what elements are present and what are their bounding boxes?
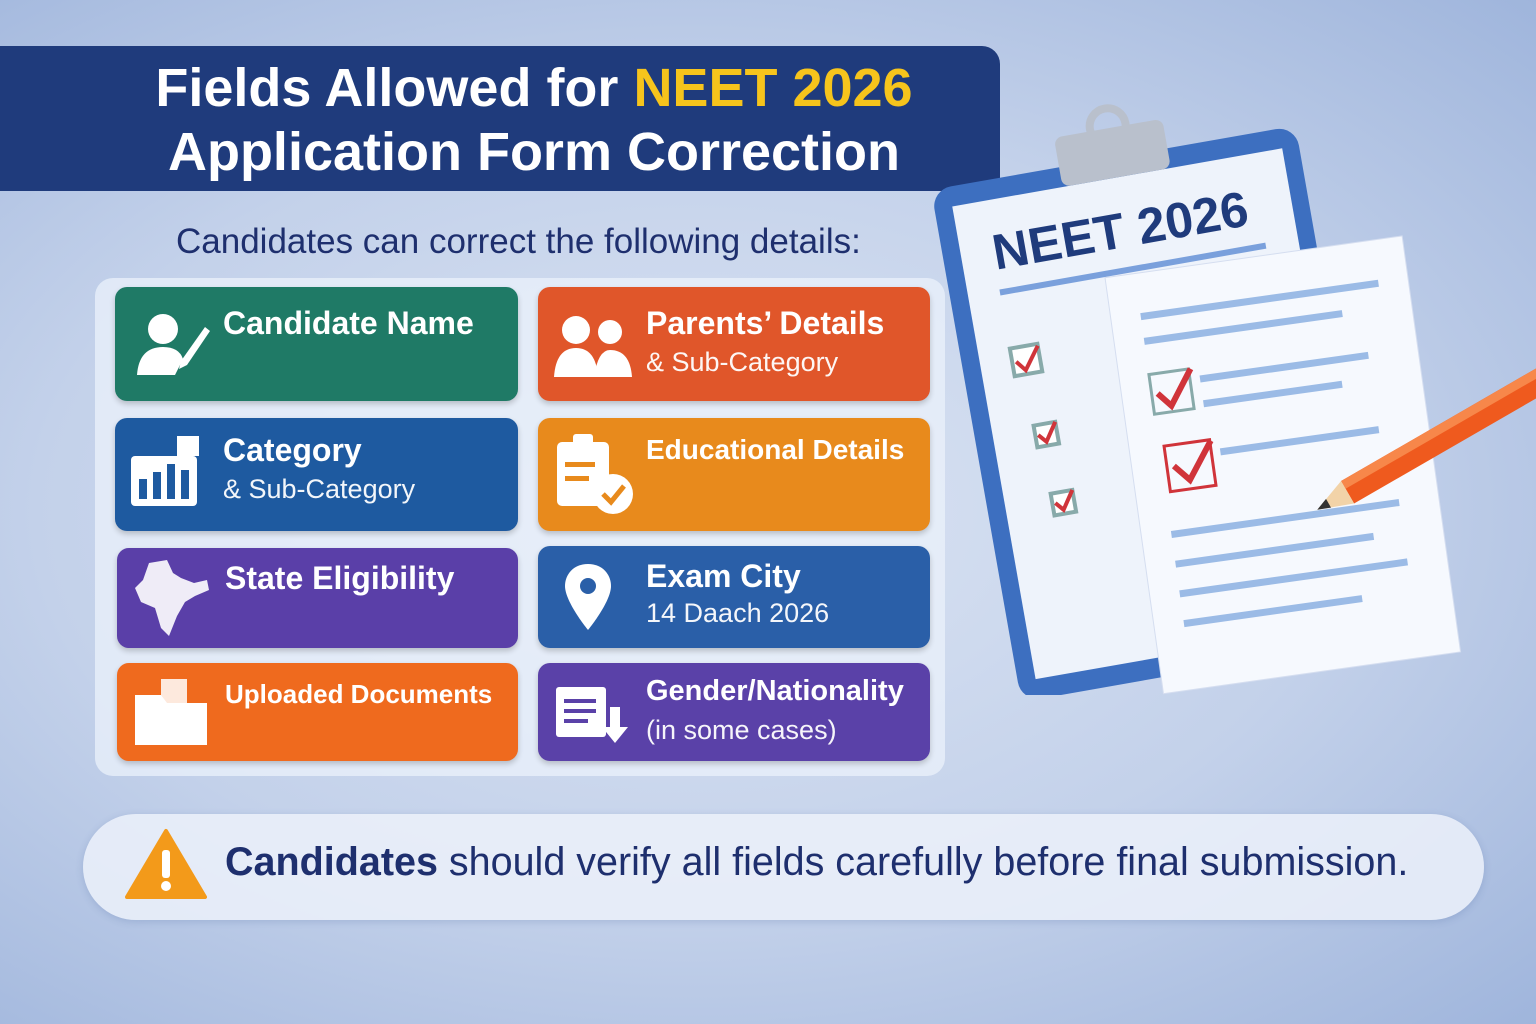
card: category: & Sub-Category (223, 474, 415, 504)
title banner: Application Form Correction (168, 122, 900, 182)
title banner (0, 46, 1000, 191)
card: candidate name (115, 287, 518, 401)
card: exam city: 14 Daach 2026 (646, 598, 829, 628)
callout: verify fields: Candidates should verify all fields carefully before final submission. (225, 840, 1408, 884)
card: gender/nationality (538, 663, 930, 761)
card: category: Category (223, 432, 362, 468)
illustration: clipboard with NEET 2026 forms: NEET 2026 (988, 181, 1252, 281)
subtitle: Candidates can correct the following details: (176, 222, 861, 261)
card: state eligibility: State Eligibility (225, 560, 454, 596)
card: exam city: Exam City (646, 558, 801, 594)
card: candidate name: Candidate Name (223, 305, 474, 341)
card: uploaded documents (117, 663, 518, 761)
panel: fields (95, 278, 945, 776)
card: uploaded documents: Uploaded Documents (225, 679, 492, 709)
card: state eligibility (117, 548, 518, 648)
card: parents details (538, 287, 930, 401)
callout: verify fields (83, 814, 1484, 920)
card: parents details: & Sub-Category (646, 347, 838, 377)
title banner: Fields Allowed for NEET 2026 (155, 58, 913, 118)
card: parents details: Parents’ Details (646, 305, 884, 341)
card: exam city (538, 546, 930, 648)
card: educational details: Educational Details (646, 434, 904, 465)
illustration: clipboard with NEET 2026 forms (934, 104, 1536, 695)
icon: warning (125, 828, 207, 899)
card: educational details (538, 418, 930, 531)
card: gender/nationality: Gender/Nationality (646, 675, 904, 707)
card: gender/nationality: (in some cases) (646, 715, 837, 745)
card: category (115, 418, 518, 531)
